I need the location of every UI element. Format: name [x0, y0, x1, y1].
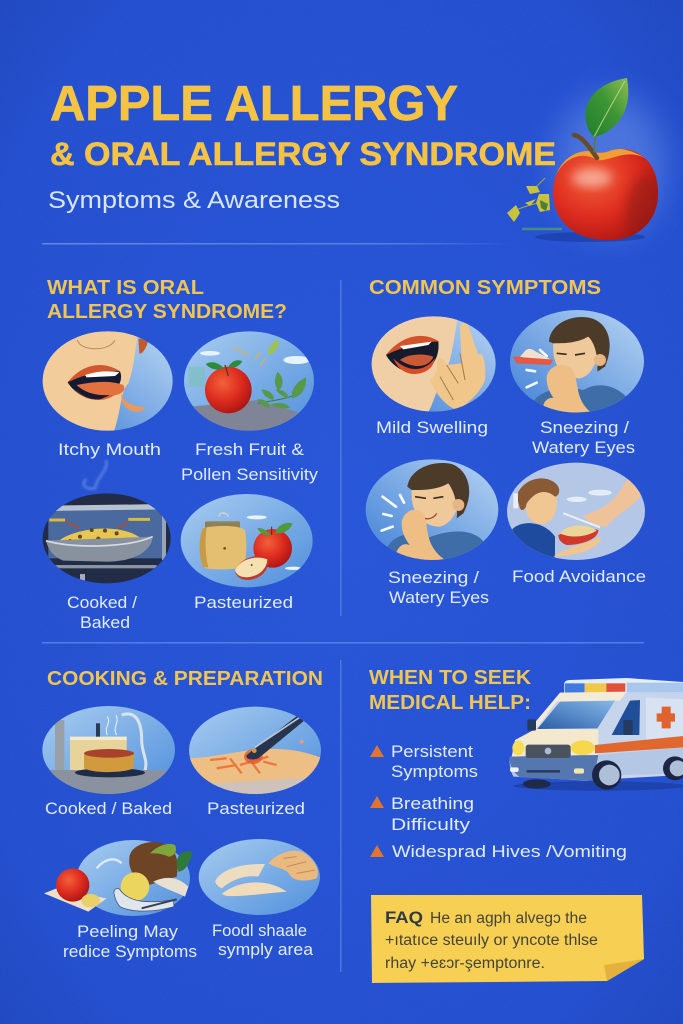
item: pasteurized jar and apple — [180, 493, 313, 612]
item: persistent symptoms: Persistent — [391, 742, 473, 761]
panel: common symptoms — [363, 277, 648, 607]
item: itchy mouth — [40, 330, 173, 459]
label: Sneezing / — [540, 418, 629, 437]
label: Baked — [80, 613, 130, 632]
label: redice Symptoms — [63, 942, 197, 961]
label: Watery Eyes — [389, 588, 489, 607]
divider lines — [42, 243, 644, 972]
panel: cooking and preparation — [40, 668, 323, 961]
label: Pasteurized — [194, 593, 293, 612]
panel: when to seek medical help — [369, 667, 683, 983]
item: food avoidance — [505, 460, 648, 586]
item: pasteurized skin — [187, 705, 323, 818]
title line 2: & ORAL ALLERGY SYNDROME — [50, 136, 556, 172]
item: cooked baked cake — [40, 705, 177, 818]
item: breathing difficulty — [370, 794, 474, 834]
callout: FAQ note: rhay +eɛɔr-şemptonre. — [385, 955, 545, 972]
item: mild swelling — [370, 315, 498, 437]
item: persistent symptoms: Symptoms — [391, 762, 478, 781]
callout: FAQ note: He an agph alvegɔ the — [430, 910, 587, 927]
warning list — [370, 742, 627, 861]
callout: FAQ note: +ıtatıce steuıly or yncote thlse — [385, 932, 598, 949]
label: Watery Eyes — [532, 438, 635, 457]
label: Pasteurized — [207, 799, 305, 818]
icon: apple with leaf — [507, 78, 670, 255]
heading: WHEN TO SEEK — [369, 667, 532, 689]
label: Food Avoidance — [512, 567, 646, 586]
label: Mild Swelling — [376, 418, 488, 437]
item: food shards — [197, 837, 323, 959]
title line 1: APPLE ALLERGY — [50, 77, 458, 131]
heading: WHAT IS ORAL — [47, 277, 204, 299]
label: symply area — [218, 940, 314, 959]
item: persistent symptoms — [370, 742, 478, 781]
callout: FAQ note: FAQ — [385, 908, 423, 927]
heading: ALLERGY SYNDROME? — [47, 301, 287, 323]
item: sneezing boy — [508, 308, 647, 457]
label: Itchy Mouth — [58, 440, 161, 459]
item: fresh fruit and pollen — [181, 330, 319, 484]
icon: ambulance — [510, 678, 683, 791]
item: sneezing boy 2 — [363, 457, 502, 607]
label: Peeling May — [77, 922, 179, 941]
heading: MEDICAL HELP: — [369, 692, 531, 714]
item: widespread hives: Widesprad Hives /Vomiting — [392, 842, 627, 861]
panel: what is oral allergy syndrome — [40, 277, 319, 632]
item: peeling — [44, 838, 197, 961]
item: cooked baked oven — [40, 460, 173, 632]
label: Pollen Sensitivity — [181, 465, 319, 484]
heading: COMMON SYMPTOMS — [369, 277, 601, 299]
item: breathing difficulty: Difficulty — [391, 815, 471, 834]
header panel — [48, 77, 670, 255]
label: Sneezing / — [388, 568, 479, 587]
subtitle: Symptoms & Awareness — [48, 187, 340, 214]
label: Cooked / Baked — [45, 799, 172, 818]
callout: FAQ note — [371, 895, 644, 983]
item: breathing difficulty: Breathing — [391, 794, 474, 813]
label: Foodl shaale — [212, 921, 307, 940]
label: Cooked / — [67, 593, 137, 612]
label: Fresh Fruit & — [195, 440, 305, 459]
heading: COOKING & PREPARATION — [47, 668, 323, 690]
